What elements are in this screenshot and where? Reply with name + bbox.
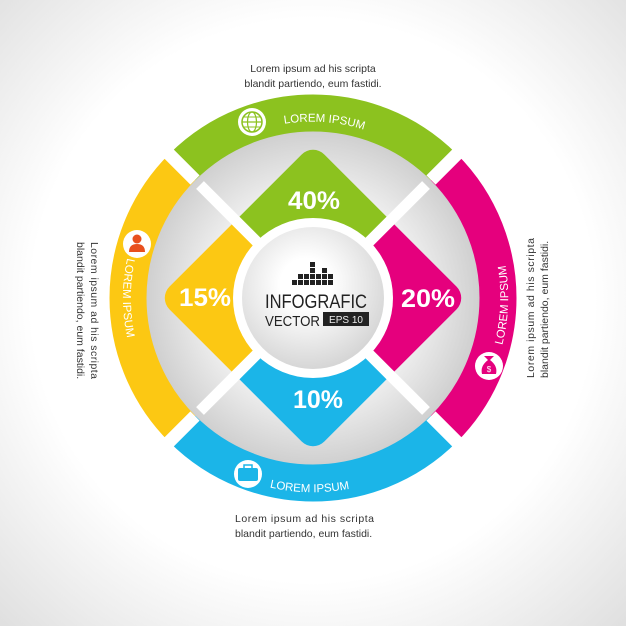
percentages: 10% <box>293 386 343 414</box>
bottom text block: blandit partiendo, eum fastidi. <box>235 528 372 540</box>
right text block: blandit partiendo, eum fastidi. <box>539 241 551 378</box>
title: INFOGRAFIC VECTOR: INFOGRAFIC <box>265 292 367 313</box>
icon: money bag <box>475 352 503 380</box>
percentages: 15% <box>179 284 231 312</box>
outer ring <box>128 113 498 483</box>
icon: globe <box>238 108 266 136</box>
icon: bars <box>292 262 333 285</box>
icon: money bag: $ <box>487 365 492 374</box>
top text block <box>244 63 382 90</box>
right text block: Lorem ipsum ad his scripta <box>525 238 537 378</box>
ring: magenta <box>430 158 516 438</box>
icon: person <box>123 230 151 258</box>
center disk <box>242 227 384 369</box>
ring labels: LOREM IPSUM <box>270 480 349 492</box>
ring: blue <box>174 416 452 502</box>
left text block <box>74 242 100 379</box>
center disk: EPS 10 <box>329 315 363 326</box>
percentages: 20% <box>401 285 455 313</box>
ring: green <box>174 94 452 180</box>
bottom text block: Lorem ipsum ad his scripta <box>235 513 374 525</box>
percentages <box>179 187 455 414</box>
top text block: Lorem ipsum ad his scripta <box>250 63 376 75</box>
center disk: VECTOR <box>265 313 320 330</box>
bottom text block <box>235 513 374 540</box>
icon: briefcase <box>234 460 262 488</box>
left text block: Lorem ipsum ad his scripta <box>88 242 100 379</box>
ring labels: LOREM IPSUM <box>122 258 135 338</box>
right text block <box>525 238 551 378</box>
grey inner disk <box>145 130 481 466</box>
percentages: 40% <box>288 187 340 215</box>
ring: yellow <box>110 158 196 438</box>
ring labels <box>122 114 508 492</box>
ring labels: LOREM IPSUM <box>284 114 366 130</box>
ring labels: LOREM IPSUM <box>494 266 508 344</box>
diamonds <box>158 143 468 453</box>
top text block: blandit partiendo, eum fastidi. <box>244 78 382 90</box>
left text block: blandit partiendo, eum fastidi. <box>74 242 86 379</box>
